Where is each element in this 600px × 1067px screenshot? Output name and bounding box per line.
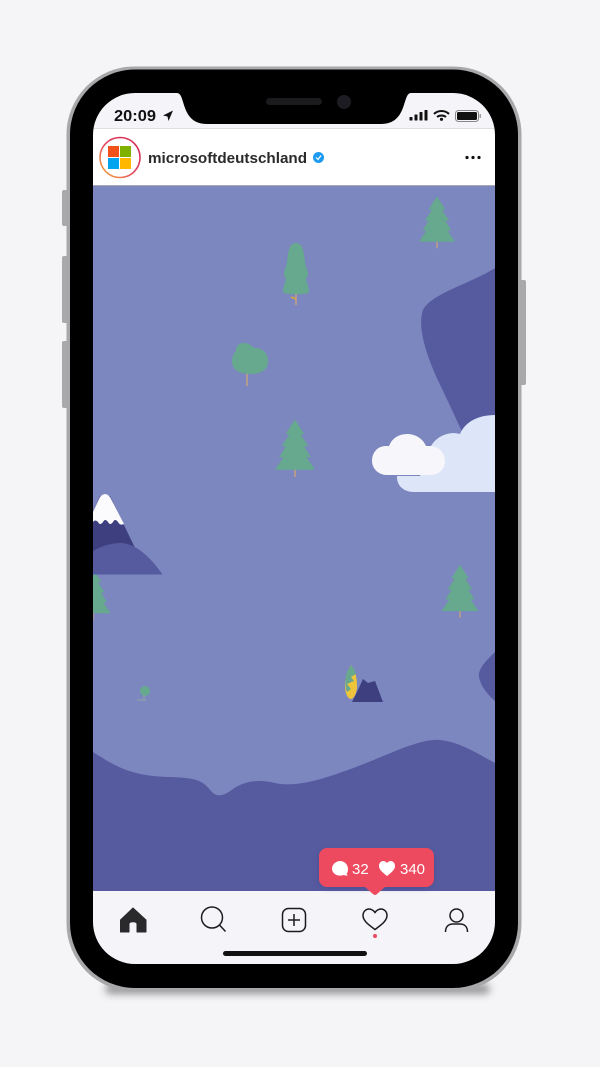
small hill right edge: [479, 652, 495, 701]
notch camera: [337, 95, 351, 109]
icon: home: [120, 908, 146, 932]
avatar: [100, 138, 140, 178]
comment count: 32: [352, 861, 369, 878]
tree: pine right: [442, 565, 478, 618]
tree: round: [232, 343, 268, 386]
snowy mountain: [93, 494, 162, 574]
icon: activity heart: [363, 909, 387, 930]
icon: wifi: [434, 111, 449, 120]
icon: profile: [446, 909, 468, 932]
bottom navigation background: [93, 891, 495, 964]
icon: heart: [379, 861, 395, 876]
like count: 340: [400, 861, 425, 878]
home indicator: [223, 951, 367, 956]
foreground hills: [93, 740, 495, 891]
icon: battery: [456, 110, 481, 122]
small dark mountain: [352, 679, 383, 702]
icon: comment bubble: [332, 861, 348, 876]
icon: add post: [282, 908, 306, 932]
side buttons: [62, 190, 526, 408]
cloud: white: [372, 434, 445, 475]
tree: tall cypress: [283, 243, 309, 305]
background hill right: [421, 268, 495, 436]
post header background: [93, 128, 495, 186]
phone shadow: [105, 984, 490, 994]
notch speaker: [266, 98, 322, 105]
surfboard: [345, 665, 357, 699]
phone mockup infographic: [62, 66, 526, 1000]
notification badge: [319, 848, 434, 895]
icon: signal bars: [410, 110, 428, 120]
illustration panel: landscape: [76, 185, 495, 891]
tree: tiny distant: [137, 686, 150, 700]
tree: pine top right: [419, 197, 455, 248]
icon: more dots: [465, 156, 481, 159]
icon: verified badge: [313, 152, 324, 163]
status bar background: [93, 93, 495, 129]
notification dot: [373, 934, 377, 938]
username: microsoftdeutschland: [148, 150, 307, 167]
tree: pine centre: [276, 420, 314, 477]
cloud: pale blue: [397, 415, 495, 492]
status time: 20:09: [114, 108, 156, 125]
phone screen: [76, 93, 495, 964]
tree: pine left edge: [93, 574, 110, 620]
icon: search: [202, 907, 226, 932]
icon: location arrow: [163, 110, 173, 121]
phone body: [66, 66, 522, 992]
